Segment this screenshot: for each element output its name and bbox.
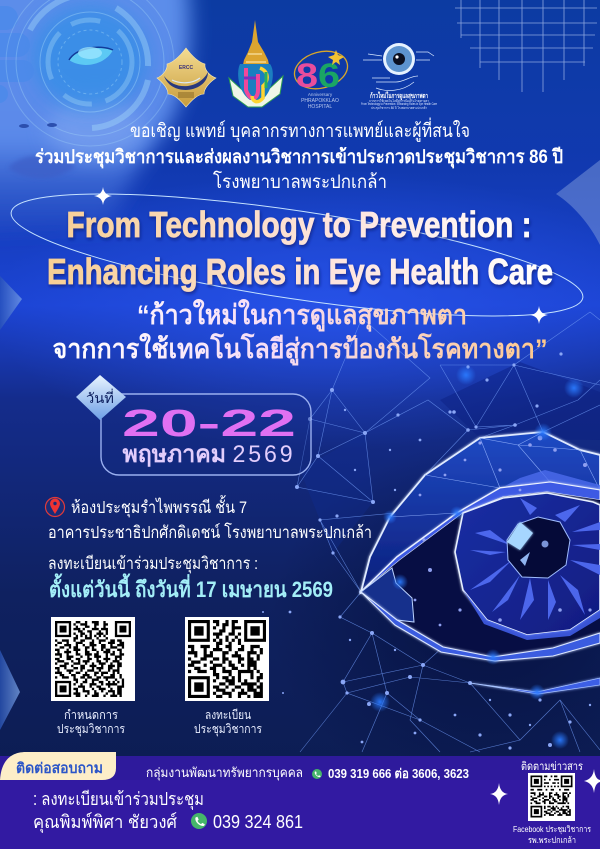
side shapes — [0, 160, 600, 730]
HR department contact — [146, 765, 469, 781]
QR captions: ประชุมวิชาการ — [57, 722, 125, 737]
QR code: schedule — [51, 617, 135, 701]
eye: iris — [455, 493, 600, 635]
Thai subtitle: จากการใช้เทคโนโลยีสู่การป้องกันโรคทางตา” — [52, 332, 548, 366]
face skin — [0, 0, 190, 232]
icon: phone — [191, 813, 207, 829]
logo: 86 anniversary: 86 — [296, 57, 340, 95]
logo: eye and hand conference mark: จากการใช้เทคโนโลยีสู่การป้องกันโรคทางตา — [369, 98, 429, 103]
main English title — [47, 204, 553, 292]
follow news block: ติดตามข่าวสาร — [521, 760, 583, 773]
QR captions — [57, 708, 262, 737]
Thai subtitle — [52, 299, 548, 366]
logo: eye and hand conference mark: From Technology to Prevention: Enhancing Roles in Eye Health Care — [361, 102, 437, 106]
registration contact: : ลงทะเบียนเข้าร่วมประชุม — [33, 789, 204, 810]
eye: specks — [414, 436, 592, 626]
eye: lower lid — [361, 592, 600, 661]
eye: lid facets — [390, 432, 600, 517]
photo: woman's face with holographic eye rings — [0, 0, 190, 232]
contact tab — [0, 752, 116, 780]
registration text — [48, 554, 333, 602]
eye: lower streak — [470, 678, 600, 694]
footer panel — [0, 752, 600, 849]
invitation text: ขอเชิญ แพทย์ บุคลากรทางการแพทย์และผู้ที่สนใจ — [130, 117, 470, 143]
logo: 86 anniversary — [290, 46, 352, 110]
logo: gold diamond emblem — [157, 48, 216, 107]
logo: 86 anniversary: PHRAPOKKLAO — [301, 98, 339, 104]
HR department contact: กลุ่มงานพัฒนาทรัพยากรบุคคล — [146, 765, 303, 781]
low-poly network background — [297, 312, 600, 752]
logo: eye and hand conference mark: ก้าวใหม่ในการดูแลสุขภาพตา — [370, 91, 428, 101]
eye: upper lid — [361, 432, 600, 592]
HR department contact: 039 319 666 ต่อ 3606, 3623 — [328, 766, 469, 781]
follow news block — [513, 760, 591, 845]
registration contact: 039 324 861 — [213, 812, 303, 832]
logo: eye and hand conference mark — [361, 43, 437, 111]
fingers — [0, 6, 34, 103]
eye: sclera — [361, 492, 600, 657]
sparkle: footer stars — [490, 769, 600, 805]
logo row — [157, 20, 437, 111]
polygonal glowing eye — [361, 423, 600, 700]
eye: lid facet lighter — [505, 470, 600, 490]
QR captions: ลงทะเบียน — [205, 708, 251, 722]
QR captions: ประชุมวิชาการ — [194, 722, 262, 737]
Thai subtitle: “ก้าวใหม่ในการดูแลสุขภาพตา — [137, 299, 467, 332]
eye: pupil — [507, 517, 570, 578]
registration contact: คุณพิมพ์พิศา ชัยวงศ์ — [33, 812, 178, 833]
decorative grid top right — [455, 0, 597, 92]
registration text: ลงทะเบียนเข้าร่วมประชุมวิชาการ : — [48, 554, 258, 574]
QR captions: กำหนดการ — [64, 708, 118, 722]
logo: hospital crest with spire — [229, 20, 283, 107]
QR code: registration — [185, 617, 269, 701]
sparkle: orbit stars — [94, 187, 548, 324]
eye: inner band — [361, 482, 600, 592]
nostrils — [19, 123, 57, 128]
lips — [8, 156, 76, 178]
rings — [6, 0, 174, 146]
registration contact — [33, 789, 303, 833]
eye: glow points — [383, 423, 552, 700]
icon: location pin — [46, 498, 64, 516]
date range: 20-22 — [122, 403, 296, 445]
logo: 86 anniversary: HOSPITAL — [308, 104, 332, 110]
follow news block: รพ.พระปกเกล้า — [528, 835, 576, 845]
venue text: ห้องประชุมรำไพพรรณี ชั้น 7 — [71, 495, 247, 518]
venue text — [48, 495, 372, 542]
month and year: พฤษภาคม 2569 — [122, 441, 296, 468]
logo: gold diamond emblem: ERCC — [179, 65, 193, 71]
network nodes — [262, 352, 591, 750]
logo: eye and hand conference mark: ประชุมวิชาการ 86 ปี โรงพยาบาลพระปกเกล้า — [371, 105, 427, 111]
eye — [69, 47, 113, 65]
date diamond tag — [76, 375, 126, 420]
eye: pupil highlights — [507, 522, 548, 566]
date box — [101, 394, 311, 475]
eye: inner corner — [361, 568, 414, 622]
contact tab: ติดต่อสอบถาม — [16, 760, 103, 777]
lit eye zone — [32, 6, 148, 110]
date diamond tag: วันที่ — [86, 389, 114, 406]
logo: 86 anniversary: Anniversary — [308, 92, 333, 97]
invitation text: โรงพยาบาลพระปกเกล้า — [213, 170, 387, 193]
eye: iris rim light — [463, 590, 600, 640]
registration text: ตั้งแต่วันนี้ ถึงวันที่ 17 เมษายน 2569 — [49, 573, 333, 602]
cheek highlight — [47, 96, 143, 160]
venue text: อาคารประชาธิปกศักดิเดชน์ โรงพยาบาลพระปกเกล้า — [48, 522, 372, 542]
eye: iris spokes — [470, 498, 600, 620]
orbit ellipse — [5, 169, 589, 341]
invitation text — [35, 117, 563, 193]
